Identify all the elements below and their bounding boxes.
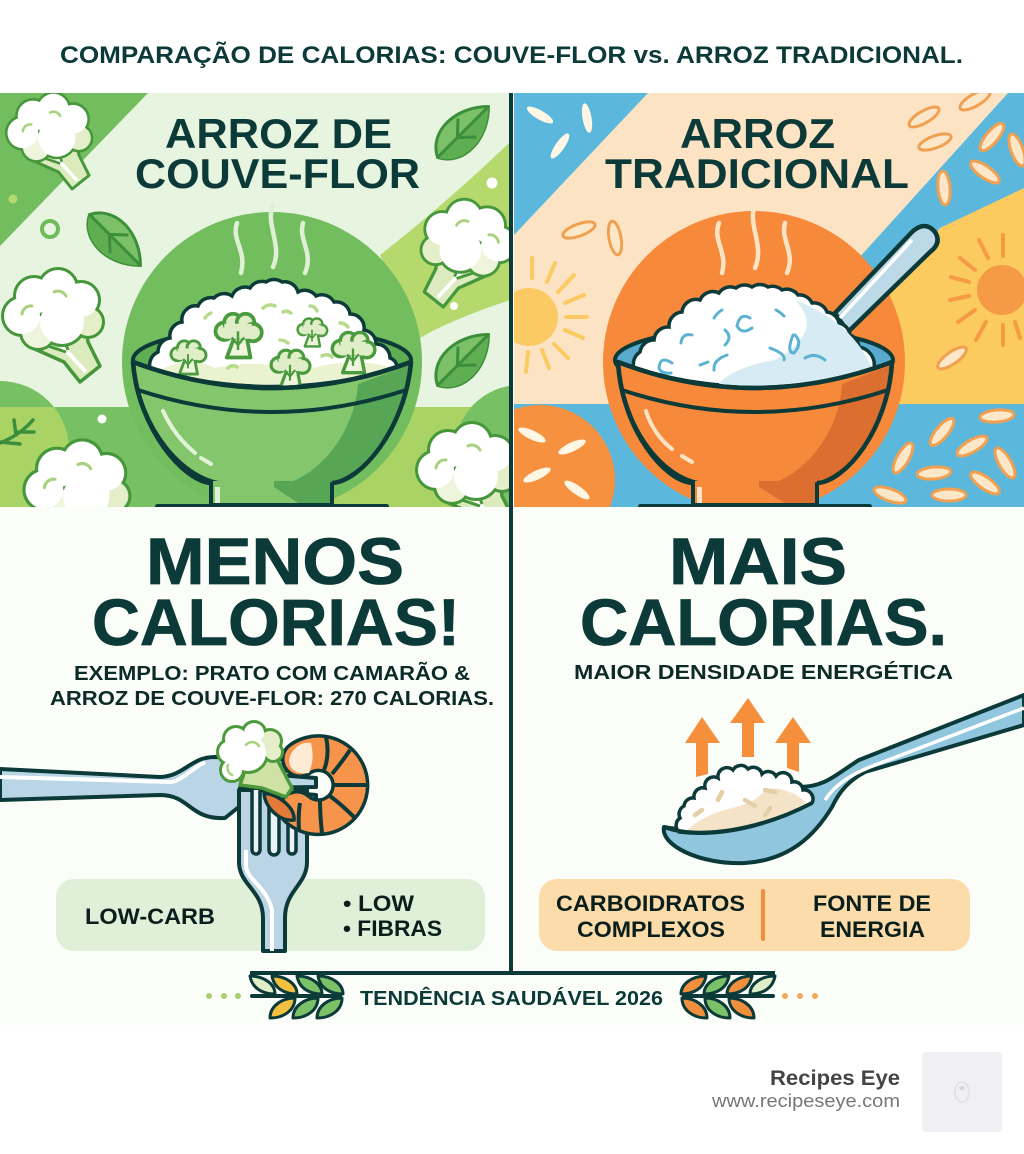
outlined rice grains [561,86,1024,506]
right circle in band [460,407,509,506]
bottom band [54,407,209,507]
text: carboidratos complexos: COMPLEXOS [577,917,725,942]
icon: up arrows [685,698,811,777]
left lime circle in band [0,407,68,507]
bowl interior [131,336,413,364]
panel: cauliflower rice illustration [0,93,509,507]
icon: shrimp [264,737,366,833]
heading: mais calorias: MAIS [669,524,847,598]
icon: cauliflower bottom right [415,421,509,507]
bottom left orange circle [465,405,615,555]
pill divider [761,889,765,941]
right green circle [471,386,509,407]
white rice grains [517,102,594,502]
icon: horizontal fork [0,757,316,818]
rice shade [160,362,392,385]
stand seam mask [695,481,761,487]
rice flecks [205,305,348,368]
panel: carbs pill [539,879,970,951]
stand highlight [215,487,220,503]
text: fonte de energia [813,891,931,942]
stand seam mask right [759,481,815,503]
text: example [50,662,494,710]
heading: arroz de couve-flor: ARROZ DE [165,110,392,157]
stand seam mask [213,481,274,486]
heading: arroz tradicional: ARROZ [680,110,835,157]
text: example: EXEMPLO: PRATO COM CAMARÃO & [74,662,470,685]
heading: arroz tradicional: TRADICIONAL [605,150,909,197]
right lime band [334,407,471,507]
cauliflower rice mound [150,279,397,386]
text: fonte de energia: FONTE DE [813,891,931,916]
icon: leaf top right [434,105,490,161]
text: trend: TENDÊNCIA SAUDÁVEL 2026 [360,986,663,1010]
center circle [122,212,422,512]
icon: sun left [500,258,587,372]
bowl interior [615,328,893,392]
center circle [603,211,905,513]
steam [717,205,790,273]
heading: arroz tradicional [605,110,909,197]
orange bowl with rice [615,284,893,509]
center divider [509,93,513,973]
bowl inner rim [622,390,888,412]
text: low fibras: • LOW [343,891,414,916]
text: example: ARROZ DE COUVE-FLOR: 270 CALORIAS. [50,688,494,710]
rice flecks [659,310,825,373]
lime swoosh [380,142,510,338]
icon: sun right [950,235,1024,345]
bowl outline redraw [133,362,411,483]
stand seam mask right [274,481,330,503]
bottom band [514,404,1024,507]
heading: menos calorias: MENOS [146,524,404,598]
rice shade [718,300,872,387]
text: carboidratos complexos: CARBOIDRATOS [556,891,745,916]
green corner triangle [0,93,148,246]
heading: menos calorias [92,524,460,659]
blue diagonal band [830,93,1024,340]
text: low fibras: • FIBRAS [343,916,442,941]
logo card [922,1052,1002,1132]
brand name: Recipes Eye [770,1067,900,1090]
heading: mais calorias: CALORIAS. [580,585,947,659]
text: low fibras [343,891,442,941]
bowl base line [155,504,389,507]
panel: traditional rice illustration [514,93,1024,507]
bowl highlight [646,411,692,462]
heading: arroz de couve-flor [136,119,420,188]
text: fonte de energia: ENERGIA [820,917,925,942]
mini florets [171,314,375,387]
sprig [0,420,34,444]
bowl body [618,362,892,484]
bowl outline redraw [618,362,892,483]
bowl stand [209,484,334,504]
icon: leaf left [86,211,142,267]
bowl base line [638,504,872,509]
blue corner triangle [514,93,648,235]
icon: cauliflower bottom left [22,438,132,507]
brand url: www.recipeseye.com [711,1090,900,1111]
yellow area [860,188,1024,407]
icon: laurel right [681,976,775,1018]
icon: vertical fork [239,790,307,951]
text: carboidratos complexos [556,891,745,942]
bowl shade [760,365,891,486]
decorative dots [8,178,498,424]
heading: menos calorias: CALORIAS! [92,585,460,659]
icon: cauliflower top left [7,94,91,189]
bowl stand [693,470,817,505]
bottom divider [250,971,775,975]
title: COMPARAÇÃO DE CALORIAS: COUVE-FLOR vs. ARROZ TRADICIONAL. [60,41,963,69]
icon: spoon with rice [664,695,1024,863]
spoon in bowl [835,226,938,332]
bowl body [133,362,411,484]
lower content background [0,507,1024,1025]
heading: arroz de couve-flor: COUVE-FLOR [135,150,420,197]
stand highlight [697,487,702,503]
left green circle [0,381,54,407]
bowl shade [294,366,408,482]
icon: laurel left [250,976,343,1018]
green bowl with rice [133,279,411,509]
bowl inner rim [138,390,406,412]
dots left [206,993,241,999]
dots right [782,993,818,999]
icon: cauliflower on fork [219,723,292,797]
text: energy density: MAIOR DENSIDADE ENERGÉTICA [574,661,953,684]
icon: leaf right [434,333,490,389]
icon: cauliflower mid left [4,270,102,382]
bowl highlight [163,411,211,464]
heading: mais calorias [580,524,947,659]
steam [236,205,308,273]
icon: cauliflower right [422,201,516,307]
rice mound [633,284,874,386]
panel: low-carb pill [56,879,485,951]
text: low-carb: LOW-CARB [85,904,215,929]
